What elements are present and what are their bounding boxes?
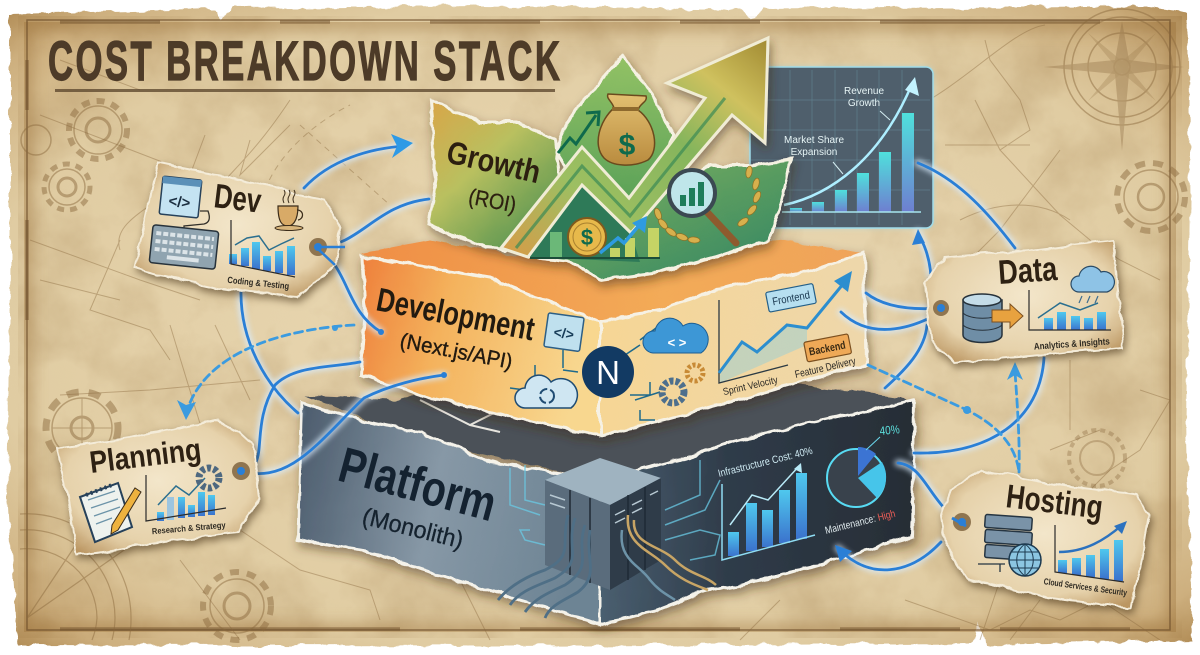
- platform left face: [298, 402, 600, 624]
- arrowheads and nodes: [177, 134, 1023, 562]
- platform heading: Platform: [333, 437, 502, 532]
- icon: rain cloud: [1071, 266, 1114, 303]
- icon: blue cloud: [643, 318, 708, 353]
- tag: Hosting: [941, 470, 1149, 608]
- circuit traces: [510, 460, 720, 560]
- Dev caption: Coding & Testing: [227, 275, 290, 291]
- tag: Dev: [135, 163, 345, 298]
- icon: code window: [544, 313, 584, 351]
- growth centre leaf: [555, 55, 672, 235]
- blue growth arrow: [600, 216, 647, 253]
- platform top face: [305, 345, 912, 480]
- icon: Next.js N logo: [582, 346, 634, 398]
- title: COST BREAKDOWN STACK: [48, 30, 562, 92]
- small trend arrow: [558, 112, 599, 153]
- Data caption: Analytics & Insights: [1034, 336, 1110, 353]
- connector traces: [510, 325, 660, 420]
- maintenance label: Maintenance: High: [824, 508, 897, 537]
- title underline: [55, 89, 555, 92]
- arrow inner highlight: [516, 98, 725, 248]
- pie chart: [827, 437, 886, 507]
- development subtitle: (Next.js/API): [398, 329, 514, 374]
- icon: coffee: [275, 190, 303, 230]
- icon: gears: [662, 365, 703, 403]
- eyelet: [952, 513, 971, 531]
- panel: growth layer: [429, 38, 791, 280]
- Dev bar chart: [229, 220, 295, 277]
- connector lines: [241, 146, 1044, 570]
- tag: Planning: [57, 420, 260, 555]
- code to keyboard connector: [184, 211, 209, 229]
- dashed connectors: [186, 325, 1019, 472]
- Hosting bar chart: [1055, 521, 1127, 582]
- icon: Next.js N logo: N: [596, 354, 620, 391]
- Planning caption: Research & Strategy: [151, 520, 226, 536]
- laurels: [653, 166, 762, 244]
- icon: database: [963, 294, 1023, 342]
- icon: code window: </>: [553, 324, 575, 342]
- panel: development layer: [360, 240, 866, 436]
- Data bar chart: [1029, 290, 1111, 330]
- dark green base: [528, 185, 640, 262]
- feature delivery label: Feature Delivery: [794, 355, 857, 381]
- icon: magnifier: [669, 170, 736, 243]
- growth subtitle: (ROI): [466, 184, 518, 217]
- development heading: Development: [374, 281, 538, 347]
- eyelet: [309, 238, 345, 265]
- panel: revenue chart screen: Growth: [848, 98, 880, 109]
- eyelet: [933, 300, 949, 316]
- frontend box: Frontend: [771, 289, 811, 308]
- backend box: [804, 334, 852, 362]
- growth bars: [530, 228, 660, 258]
- infrastructure label: Infrastructure Cost: 40%: [717, 445, 814, 480]
- backend box: Backend: [808, 340, 847, 358]
- icon: gear: [199, 468, 219, 488]
- panel: revenue chart screen: Market Share: [784, 135, 844, 146]
- panel: platform monolith layer: [298, 345, 914, 624]
- growth arrow: [501, 38, 768, 257]
- icon: gold coin: $: [581, 225, 593, 250]
- icon: gold coin: [568, 218, 606, 256]
- Planning heading: Planning: [88, 432, 203, 480]
- growth left leaf: [429, 100, 560, 250]
- development left face: [360, 256, 600, 436]
- platform subtitle: (Monolith): [360, 503, 466, 554]
- Hosting heading: Hosting: [1004, 477, 1105, 526]
- platform right face: [600, 400, 914, 624]
- connector glow: [241, 145, 1044, 570]
- tag: Data: [925, 240, 1124, 363]
- infrastructure bar chart: [722, 463, 815, 560]
- frontend box: [766, 283, 816, 312]
- development right face: [600, 253, 866, 436]
- pie value: 40%: [879, 422, 900, 438]
- icon: server and globe: [978, 514, 1041, 576]
- icon: money bag: [598, 94, 655, 165]
- growth heading: Growth: [443, 134, 544, 190]
- icon: sync cloud: [515, 375, 577, 408]
- icon: server rack: [498, 458, 716, 618]
- eyelet: [232, 462, 250, 480]
- icon: notebook and pencil: [80, 483, 141, 542]
- icon: money bag: $: [619, 129, 636, 162]
- icon: code window: [159, 176, 202, 218]
- Dev heading: Dev: [212, 177, 263, 221]
- icon: keyboard: [149, 225, 219, 269]
- sprint velocity label: Sprint Velocity: [722, 375, 779, 398]
- icon: code window: </>: [168, 193, 191, 212]
- panel: revenue chart screen: Revenue: [844, 86, 884, 97]
- icon: blue cloud: < >: [668, 335, 687, 350]
- sprint velocity chart: [719, 271, 852, 383]
- panel: revenue chart screen: Expansion: [791, 147, 837, 158]
- Planning bar chart: [146, 475, 226, 521]
- development top face: [362, 240, 864, 330]
- panel: revenue chart screen: [750, 67, 933, 228]
- growth lower right leaf: [528, 160, 791, 280]
- Hosting caption: Cloud Services & Security: [1043, 576, 1128, 598]
- blue connectors: [177, 134, 1044, 570]
- Data heading: Data: [997, 250, 1059, 292]
